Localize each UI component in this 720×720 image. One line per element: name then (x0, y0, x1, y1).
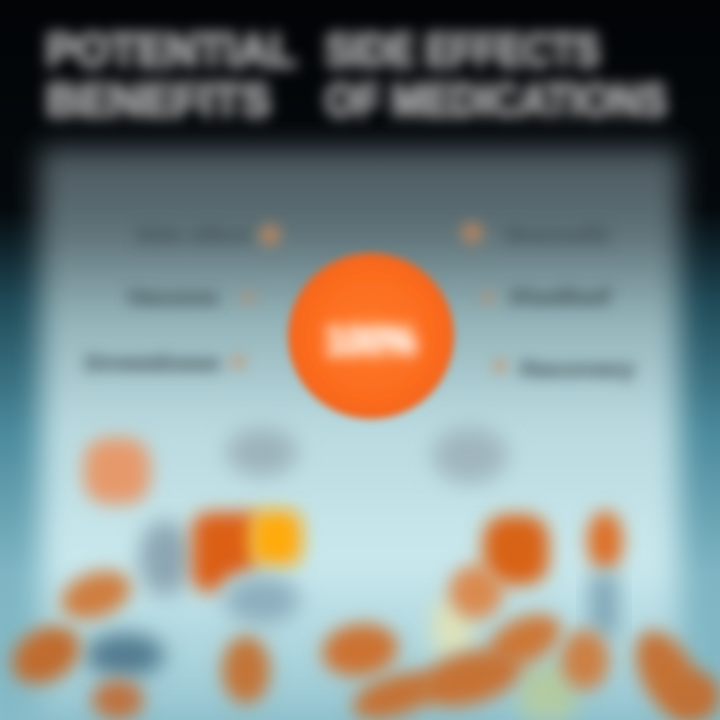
title: POTENTIAL (46, 24, 296, 76)
pill (55, 562, 137, 628)
left labels: Side effect (135, 225, 250, 247)
pill (2, 614, 90, 696)
pill (92, 680, 144, 720)
right labels: Benefit (505, 225, 611, 247)
panel: main sheet (40, 148, 680, 720)
title: BENEFITS (46, 74, 271, 126)
right labels: Recovery (520, 359, 636, 381)
title (46, 24, 667, 126)
pill (413, 639, 527, 717)
connector dots (231, 222, 507, 373)
pill (623, 620, 713, 720)
pill (672, 672, 720, 720)
grey icon right (432, 427, 508, 483)
title: OF MEDICATIONS (325, 74, 667, 126)
pill (347, 663, 443, 720)
pill (561, 630, 609, 690)
narrow orange capsule (587, 511, 623, 571)
orange tile left (84, 438, 150, 504)
pill (222, 636, 270, 704)
yellow capsule (250, 510, 302, 566)
circle label: 100% (326, 319, 416, 363)
left labels (85, 225, 250, 375)
central orange circle (288, 253, 454, 419)
pale green strip (432, 600, 472, 656)
grey pill shadow (139, 520, 191, 596)
title: SIDE EFFECTS (325, 24, 600, 76)
orange capsule (192, 512, 256, 592)
pill (449, 565, 503, 619)
left labels: Drowsiness (85, 353, 220, 375)
pills group (2, 510, 720, 720)
grey icon left (226, 428, 298, 476)
grey blister (224, 576, 300, 624)
pill (481, 604, 569, 676)
grey vial (590, 572, 618, 638)
pill (319, 619, 401, 681)
right labels: Relief (510, 287, 611, 309)
orange capsule right (483, 515, 549, 585)
left labels: Nausea (128, 287, 219, 309)
right labels (505, 225, 636, 381)
dark blister (85, 633, 165, 677)
pale green block (520, 665, 575, 720)
